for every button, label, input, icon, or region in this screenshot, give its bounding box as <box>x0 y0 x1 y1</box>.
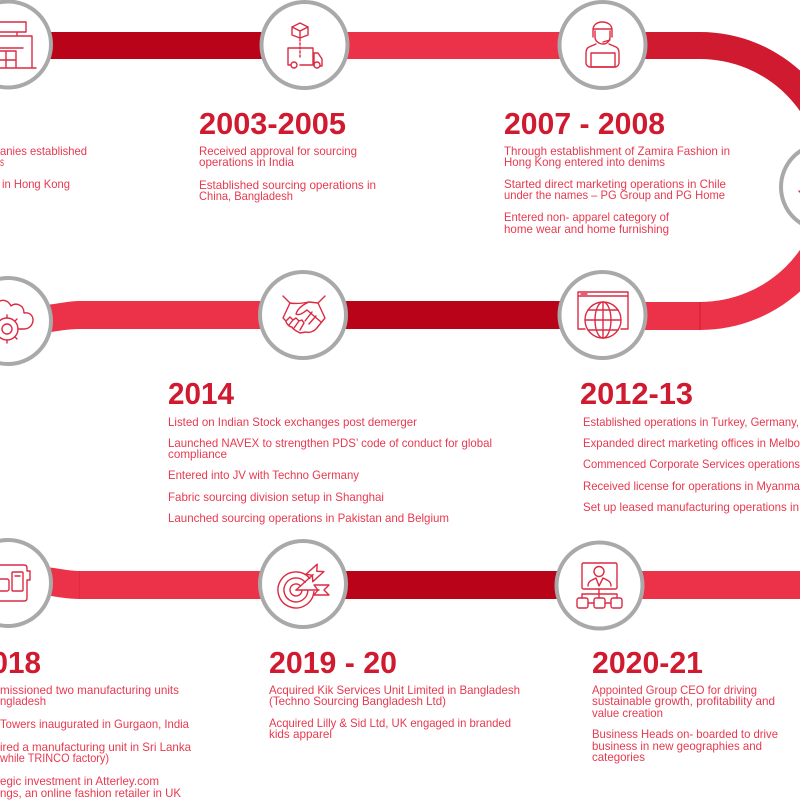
year heading: 2020-21 <box>592 646 703 680</box>
icon: manufacturing devices <box>0 540 51 626</box>
icon: storefront <box>0 2 51 88</box>
description: Acquired Lilly & Sid Ltd, UK engaged in branded <box>269 716 511 730</box>
description: Fabric sourcing division setup in Shanghai <box>168 490 384 504</box>
description: categories <box>592 750 645 764</box>
description: while TRINCO factory) <box>0 751 109 765</box>
description <box>583 415 800 514</box>
description: in Hong Kong <box>2 177 70 191</box>
description: home wear and home furnishing <box>504 222 669 236</box>
description: Through establishment of Zamira Fashion in <box>504 144 730 158</box>
description: sustainable growth, profitability and <box>592 694 775 708</box>
description: Launched NAVEX to strengthen PDS’ code of conduct for global <box>168 436 492 450</box>
description <box>592 683 778 764</box>
icon: leader on screen with org chart <box>556 542 642 628</box>
year heading: 2014 <box>168 377 234 411</box>
description: Hong Kong entered into denims <box>504 155 665 169</box>
icon: target with arrows <box>260 541 346 627</box>
description: Acquired Kik Services Unit Limited in Bangladesh <box>269 683 520 697</box>
year heading: 2003-2005 <box>199 107 346 141</box>
description: (Techno Sourcing Bangladesh Ltd) <box>269 694 446 708</box>
milestone: 2019 - 20 <box>260 541 520 741</box>
description: ngladesh <box>0 694 46 708</box>
description <box>168 415 492 525</box>
description: Launched sourcing operations in Pakistan and Belgium <box>168 511 449 525</box>
description: Entered non- apparel category of <box>504 210 670 224</box>
description: missioned two manufacturing units <box>0 683 179 697</box>
milestone: founding <box>0 2 87 191</box>
description: Received approval for sourcing <box>199 144 357 158</box>
icon: support agent with laptop <box>560 2 646 88</box>
year heading: 2012-13 <box>580 377 693 411</box>
description: compliance <box>168 447 227 461</box>
description: Towers inaugurated in Gurgaon, India <box>0 717 189 731</box>
icon: cloud with gear <box>0 278 51 364</box>
milestone: 2012-13 <box>560 272 800 514</box>
description: business in new geographies and <box>592 739 762 753</box>
description: kids apparel <box>269 727 332 741</box>
year heading: 2019 - 20 <box>269 646 397 680</box>
milestone: 2018 <box>0 540 191 800</box>
description: value creation <box>592 706 663 720</box>
icon: delivery truck <box>262 2 348 88</box>
milestone: 2003-2005 <box>199 2 376 203</box>
description: under the names – PG Group and PG Home <box>504 188 725 202</box>
description: ngs, an online fashion retailer in UK <box>0 786 181 800</box>
description: Started direct marketing operations in Chile <box>504 177 726 191</box>
description: Appointed Group CEO for driving <box>592 683 757 697</box>
description: Established sourcing operations in <box>199 178 376 192</box>
description: anies established <box>0 144 87 158</box>
description: operations in India <box>199 155 294 169</box>
description: Listed on Indian Stock exchanges post demerger <box>168 415 417 429</box>
milestone: cloud and gear <box>0 278 51 364</box>
timeline ribbon <box>45 32 800 599</box>
description: Entered into JV with Techno Germany <box>168 468 359 482</box>
milestone: 2020-21 <box>556 542 778 764</box>
icon: right edge milestone circle <box>781 144 800 230</box>
milestone: 2007 - 2008 <box>504 2 730 236</box>
description: China, Bangladesh <box>199 189 293 203</box>
icon: globe in browser window <box>560 272 646 358</box>
description: ired a manufacturing unit in Sri Lanka <box>0 740 191 754</box>
description: Business Heads on- boarded to drive <box>592 727 778 741</box>
description <box>269 683 520 741</box>
description: egic investment in Atterley.com <box>0 774 159 788</box>
description <box>0 683 191 800</box>
description: s <box>0 155 4 169</box>
description <box>199 144 376 203</box>
milestone: 2014 <box>168 272 492 525</box>
description <box>0 144 87 191</box>
icon: handshake <box>260 272 346 358</box>
description <box>504 144 730 236</box>
year heading: 2007 - 2008 <box>504 107 665 141</box>
